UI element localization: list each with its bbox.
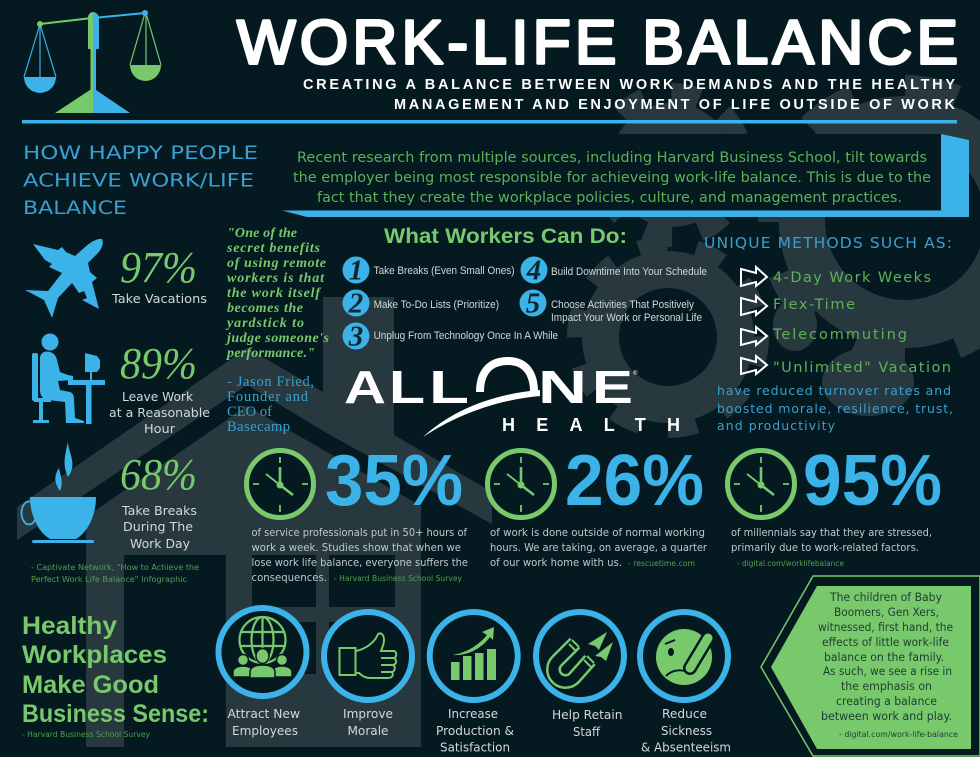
icon: clock bbox=[488, 450, 554, 518]
title: WORK-LIFE BALANCE bbox=[237, 8, 958, 78]
icon: balance scale bbox=[24, 10, 161, 113]
intro text: the employer being most responsible for achieveing work-life balance. This is due to the bbox=[293, 169, 931, 186]
subtitle: CREATING A BALANCE BETWEEN WORK DEMANDS AND THE HEALTHY bbox=[303, 77, 955, 93]
benefit: increase production: Production & bbox=[436, 723, 514, 738]
intro text: Recent research from multiple sources, including Harvard Business School, tilt towards bbox=[297, 149, 927, 166]
description: of service professionals put in 50+ hours of bbox=[252, 527, 467, 539]
stat: 68% take breaks: Work Day bbox=[130, 536, 191, 551]
logo: AllOne Health: E bbox=[592, 361, 633, 413]
icon: rising bars bbox=[451, 627, 496, 680]
stat: 89% leave work: Leave Work bbox=[122, 389, 194, 404]
benefit: reduce sickness: Reduce bbox=[662, 706, 707, 721]
description: - Harvard Business School Survey bbox=[334, 573, 462, 583]
tip 5 bbox=[520, 288, 702, 324]
benefit: reduce sickness: & Absenteeism bbox=[641, 740, 731, 754]
icon: clock bbox=[246, 450, 314, 518]
attribution: - Jason Fried, bbox=[227, 374, 314, 390]
stat: 89% leave work bbox=[109, 339, 210, 436]
stat: 89% leave work: 89% bbox=[120, 339, 197, 388]
method: flex-time: Flex-Time bbox=[773, 297, 855, 313]
tip 5: Impact Your Work or Personal Life bbox=[551, 312, 702, 324]
tip 5: Choose Activities That Positively bbox=[551, 299, 695, 311]
icon: magnet bbox=[553, 632, 613, 682]
tip 1: Take Breaks (Even Small Ones) bbox=[374, 265, 515, 277]
benefit: increase production bbox=[430, 612, 518, 754]
method: flex-time bbox=[741, 296, 855, 315]
heading: healthy workplaces: Business Sense: bbox=[22, 700, 209, 728]
list: unique methods bbox=[741, 267, 951, 376]
tip 3: 3 bbox=[348, 320, 363, 352]
attribution bbox=[227, 374, 314, 435]
tip 3: Unplug From Technology Once In A While bbox=[374, 330, 558, 342]
description: hours. We are taking, on average, a quarter bbox=[490, 542, 708, 554]
heading: healthy workplaces: Healthy bbox=[22, 612, 117, 640]
heading: how happy people: HOW HAPPY PEOPLE bbox=[23, 142, 258, 164]
quote: Jason Fried: becomes the bbox=[227, 301, 303, 316]
description: work a week. Studies show that when we bbox=[252, 542, 461, 554]
panel: intro text box bbox=[281, 134, 969, 217]
quote: Jason Fried bbox=[225, 226, 330, 435]
heading: what workers can do: What Workers Can Do: bbox=[384, 224, 627, 248]
tip 2: 2 bbox=[348, 288, 363, 320]
source: - Harvard Business School Survey bbox=[22, 729, 150, 739]
benefit: attract new employees: Employees bbox=[232, 723, 298, 738]
text: methods result: and productivity bbox=[717, 418, 836, 433]
icon: person at desk bbox=[32, 334, 105, 424]
logo: AllOne Health: L bbox=[389, 361, 425, 413]
method: unlimited vacation: "Unlimited" Vacation bbox=[773, 360, 951, 376]
intro text bbox=[293, 149, 931, 206]
quote: Jason Fried: "One of the bbox=[227, 226, 297, 241]
tip 1: 1 bbox=[349, 254, 363, 286]
quote: Jason Fried: the work itself bbox=[227, 286, 321, 301]
logo: AllOne Health: L bbox=[429, 361, 469, 413]
benefit: improve morale: Improve bbox=[343, 706, 393, 721]
tip 2: Make To-Do Lists (Prioritize) bbox=[374, 299, 499, 311]
attribution: Basecamp bbox=[227, 419, 290, 435]
benefit: help retain staff: Help Retain bbox=[552, 707, 622, 722]
method: 4-day work weeks: 4-Day Work Weeks bbox=[773, 270, 931, 286]
callout text: As such, we see a rise in bbox=[823, 664, 952, 678]
heading: how happy people bbox=[23, 142, 258, 219]
benefit: improve morale: Morale bbox=[348, 723, 389, 738]
callout text bbox=[818, 590, 958, 739]
text: methods result: have reduced turnover rates and bbox=[717, 383, 951, 398]
callout text: creating a balance bbox=[836, 694, 937, 708]
description: of work is done outside of normal working bbox=[490, 527, 705, 539]
logo: AllOne Health: HEALTH bbox=[502, 415, 680, 435]
callout text: effects of little work-life bbox=[822, 635, 949, 649]
benefit: increase production: Satisfaction bbox=[440, 740, 510, 754]
benefit: attract new employees bbox=[218, 608, 306, 738]
description: - rescuetime.com bbox=[628, 558, 695, 568]
tip 2 bbox=[342, 288, 499, 320]
icon: clock bbox=[728, 450, 794, 518]
description: of our work home with us. bbox=[490, 557, 622, 569]
benefit: reduce sickness: Sickness bbox=[661, 723, 712, 738]
heading: how happy people: BALANCE bbox=[23, 197, 127, 219]
description: - digital.com/worklifebalance bbox=[737, 558, 844, 568]
quote: Jason Fried: judge someone's bbox=[225, 331, 330, 346]
text: methods result: boosted morale, resilience, trust, bbox=[717, 401, 953, 416]
tip 1 bbox=[342, 254, 515, 286]
benefit: attract new employees: Attract New bbox=[228, 706, 300, 721]
stat: 26% bbox=[488, 441, 708, 569]
stat: 95%: 95% bbox=[803, 441, 942, 521]
stat: 89% leave work: Hour bbox=[144, 421, 176, 436]
callout text: The children of Baby bbox=[829, 590, 942, 604]
description: lose work life balance, everyone suffers the bbox=[252, 557, 468, 569]
icon: globe and people bbox=[233, 617, 292, 678]
quote: Jason Fried: yardstick to bbox=[225, 316, 304, 331]
source: captivate network bbox=[31, 562, 199, 584]
icon: sick face bbox=[656, 629, 712, 685]
stat: 68% take breaks: 68% bbox=[120, 450, 197, 499]
tip 4: Build Downtime Into Your Schedule bbox=[551, 266, 707, 278]
benefit: help retain staff bbox=[536, 612, 624, 739]
attribution: Founder and bbox=[227, 389, 309, 405]
source: captivate network: - Captivate Network, "How to Achieve the bbox=[31, 562, 199, 572]
heading: healthy workplaces bbox=[22, 612, 209, 739]
stat: 97% take vacations: 97% bbox=[120, 243, 197, 292]
quote: Jason Fried: of using remote bbox=[227, 256, 326, 271]
benefit: reduce sickness bbox=[640, 612, 731, 754]
callout text: balance on the family. bbox=[824, 650, 944, 664]
description: of millennials say that they are stressed, bbox=[731, 527, 932, 539]
logo: AllOne Health: A bbox=[344, 361, 386, 413]
subtitle bbox=[303, 77, 956, 113]
stat: 68% take breaks bbox=[120, 450, 197, 551]
method: unlimited vacation bbox=[741, 356, 951, 376]
description bbox=[490, 527, 708, 569]
heading: how happy people: ACHIEVE WORK/LIFE bbox=[23, 170, 254, 192]
list: worker tips bbox=[342, 254, 707, 352]
icon: thumbs up bbox=[340, 633, 396, 678]
source: captivate network: Perfect Work Life Balance" Infographic bbox=[31, 574, 187, 584]
description: consequences. bbox=[252, 572, 327, 584]
stat: 35% bbox=[246, 441, 468, 584]
callout text: witnessed, first hand, the bbox=[818, 620, 953, 634]
stat: 68% take breaks: During The bbox=[123, 519, 193, 534]
description: primarily due to work-related factors. bbox=[731, 542, 919, 554]
callout: baby boomers bbox=[761, 576, 980, 756]
stat: 26%: 26% bbox=[565, 441, 704, 521]
method: telecommuting: Telecommuting bbox=[772, 327, 907, 343]
heading: unique methods: UNIQUE METHODS SUCH AS: bbox=[704, 234, 952, 252]
quote: Jason Fried: workers is that bbox=[227, 271, 325, 286]
benefit: help retain staff: Staff bbox=[573, 724, 600, 739]
benefit: increase production: Increase bbox=[448, 706, 498, 721]
quote: Jason Fried: performance." bbox=[226, 346, 315, 361]
logo: AllOne Health: ® bbox=[633, 370, 638, 377]
stat: 89% leave work: at a Reasonable bbox=[109, 405, 210, 420]
tip 5: 5 bbox=[526, 288, 540, 320]
callout text: between work and play. bbox=[821, 709, 952, 723]
heading: healthy workplaces: Workplaces bbox=[22, 641, 167, 669]
callout text: the emphasis on bbox=[841, 679, 932, 693]
benefit: improve morale bbox=[324, 612, 412, 738]
description bbox=[252, 527, 468, 584]
tip 4 bbox=[520, 254, 707, 286]
stat: 68% take breaks: Take Breaks bbox=[121, 503, 197, 518]
attribution: CEO of bbox=[227, 404, 272, 420]
callout text: Boomers, Gen Xers, bbox=[834, 605, 939, 619]
stat: 97% take vacations bbox=[111, 243, 207, 306]
quote: Jason Fried: secret benefits bbox=[226, 241, 321, 256]
text: methods result bbox=[717, 383, 953, 433]
tip 4: 4 bbox=[526, 254, 541, 286]
icon: airplane bbox=[25, 239, 103, 318]
stat: 97% take vacations: Take Vacations bbox=[111, 291, 207, 306]
intro text: fact that they create the workplace policies, culture, and management practices. bbox=[317, 189, 902, 206]
heading: healthy workplaces: Make Good bbox=[22, 671, 159, 699]
callout text: - digital.com/work-life-balance bbox=[839, 729, 958, 739]
icon: coffee cup bbox=[22, 442, 96, 543]
description bbox=[731, 527, 932, 568]
subtitle: MANAGEMENT AND ENJOYMENT OF LIFE OUTSIDE OF WORK bbox=[394, 97, 956, 113]
stat: 35%: 35% bbox=[325, 441, 463, 521]
logo: AllOne Health: N bbox=[538, 361, 587, 413]
stat: 95% bbox=[728, 441, 942, 568]
logo: AllOne Health bbox=[344, 361, 680, 437]
tip 3 bbox=[342, 320, 558, 352]
